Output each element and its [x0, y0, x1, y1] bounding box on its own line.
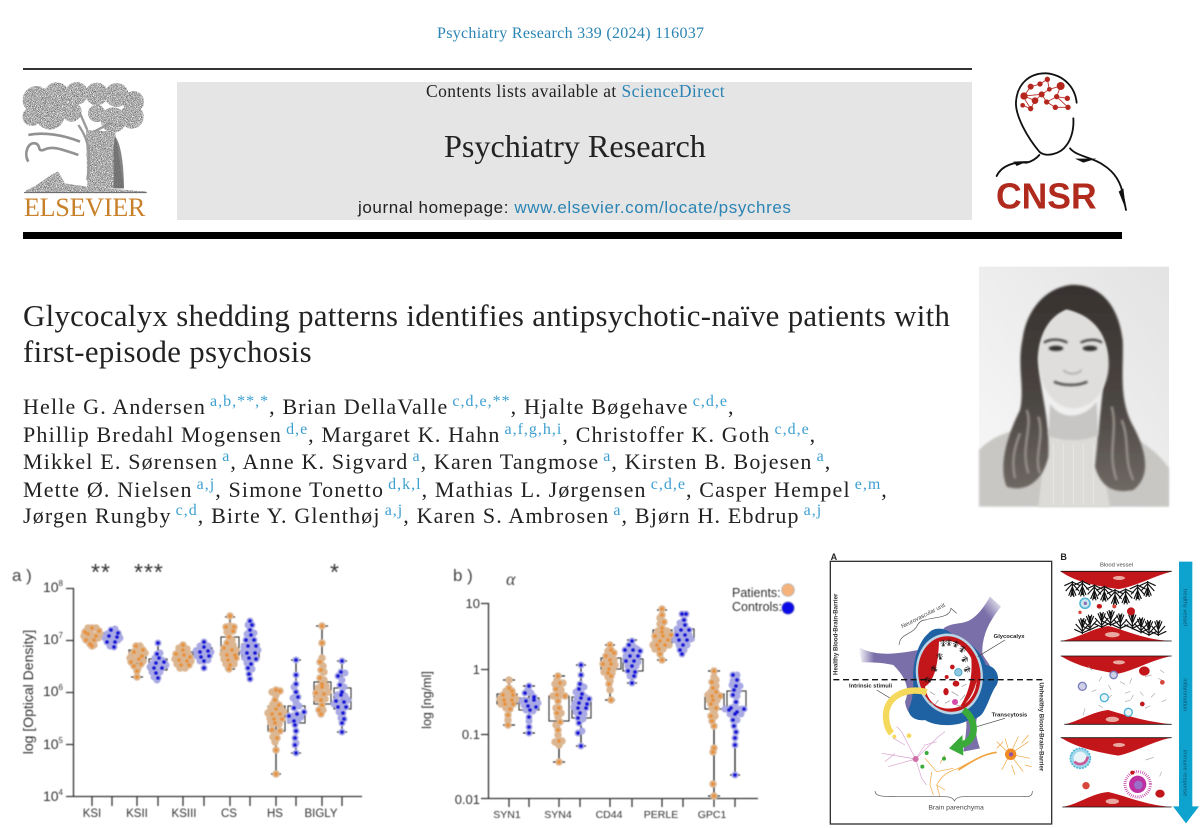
- dashed divider: [833, 678, 1043, 682]
- green particles: [920, 751, 946, 769]
- y ticks: 8: [59, 579, 64, 588]
- y ticks: 10: [43, 579, 59, 595]
- glycocalyx callout: Glycocalyx: [994, 634, 1025, 640]
- article title: first-episode psychosis: [23, 335, 312, 369]
- controls dots: [105, 621, 348, 753]
- tufts in vessel: [923, 639, 971, 685]
- chart a: [12, 559, 363, 820]
- significance stars: ***: [134, 559, 164, 585]
- box plots: [497, 629, 746, 721]
- logo wordmark: ELSEVIER: [24, 193, 145, 222]
- panel letter A: A: [831, 552, 838, 562]
- glycocalyx callout: [978, 634, 1025, 657]
- authors: Mikkel E. Sørensena, Anne K. Sigvarda, Karen Tangmosea, Kirsten B. Bojesena,: [23, 448, 831, 474]
- barrier side labels: Healthy Blood-Brain-Barrier: [832, 593, 839, 675]
- top rule: [23, 68, 972, 70]
- legend: Patients:: [732, 586, 781, 600]
- endothelial blue ring: [909, 629, 998, 725]
- blood vessel label: Blood vessel: [1100, 563, 1133, 569]
- article title: Glycocalyx shedding patterns identifies antipsychotic-naïve patients with: [23, 299, 950, 333]
- y ticks: 1: [473, 662, 480, 677]
- y ticks: 0.01: [455, 792, 480, 807]
- journal banner: [177, 82, 972, 220]
- x labels: BIGLY: [304, 808, 338, 820]
- intrinsic stimuli callout and yellow arrow: [849, 683, 927, 739]
- thick rule: [23, 232, 1122, 239]
- shedding fibers: [928, 684, 967, 707]
- astrocyte: [858, 597, 1001, 752]
- y ticks: 10: [43, 683, 59, 699]
- chart b: [420, 566, 796, 821]
- panel B inflammation vessel: [1061, 656, 1172, 724]
- neurovascular brace: [899, 608, 957, 645]
- author portrait: [978, 266, 1170, 508]
- vessel: [909, 628, 989, 720]
- controls dots: [522, 614, 744, 775]
- alpha label: α: [506, 569, 516, 589]
- panel B healthy vessel: [1061, 571, 1172, 641]
- y ticks: 10: [43, 736, 59, 752]
- panel A: blood-brain barrier diagram: Unhealthy Blood-Brain-Barrier: [1038, 682, 1045, 772]
- transcytosis callout and green arrow: [949, 710, 1027, 756]
- x labels: [493, 809, 726, 821]
- y ticks: 5: [59, 736, 64, 745]
- journal name: Psychiatry Research: [444, 128, 706, 164]
- y ticks: 10: [466, 596, 480, 611]
- legend: [732, 584, 794, 614]
- x labels: HS: [267, 808, 283, 820]
- pink neuron: [882, 727, 945, 785]
- authors: Jørgen Rungbyc,d, Birte Y. Glenthøja,j, Karen S. Ambrosena, Bjørn H. Ebdrupa,j: [23, 502, 822, 528]
- homepage line: journal homepage: www.elsevier.com/locate/psychres: [358, 198, 792, 217]
- panel label b: b ): [453, 566, 473, 585]
- intrinsic stimuli callout and yellow arrow: Intrinsic stimuli: [849, 683, 892, 689]
- x labels: CS: [221, 808, 237, 820]
- significance stars: **: [91, 559, 111, 585]
- significance stars: *: [330, 559, 339, 585]
- panel letter B: B: [1060, 552, 1067, 562]
- x labels: SYN4: [544, 809, 572, 821]
- box plots: [83, 633, 351, 731]
- progress arrow: immune response: [1182, 750, 1188, 796]
- x labels: KSIII: [172, 808, 196, 820]
- significance stars: [91, 559, 339, 585]
- y ticks: 7: [59, 631, 64, 640]
- x labels: GPC1: [698, 809, 726, 821]
- logo: CNSR: [996, 72, 1127, 216]
- whiskers: [503, 609, 740, 796]
- article title: [23, 299, 950, 369]
- panel B immune response vessel: [1061, 738, 1172, 807]
- y axis title: log [ng/ml]: [420, 671, 434, 729]
- orange neuron: [925, 735, 1032, 797]
- contents line: Contents lists available at ScienceDirect: [426, 81, 725, 101]
- y ticks: 10: [43, 788, 59, 804]
- panel A: blood-brain barrier diagram: [830, 552, 1199, 825]
- neurovascular label: Neurovascular unit: [901, 603, 947, 630]
- x labels: [83, 808, 338, 820]
- authors: Phillip Bredahl Mogensend,e, Margaret K. Hahna,f,g,h,i, Christoffer K. Gothc,d,e,: [23, 421, 816, 447]
- x labels: KSI: [83, 808, 101, 820]
- panel label a: a ): [12, 566, 32, 585]
- whiskers: [88, 617, 347, 774]
- authors: Helle G. Andersena,b,**,*, Brian DellaVallec,d,e,**, Hjalte Bøgehavec,d,e,: [23, 393, 735, 419]
- x labels: KSII: [126, 808, 148, 820]
- y ticks: 0.1: [462, 727, 480, 742]
- authors: Mette Ø. Nielsena,j, Simone Tonettod,k,l, Mathias L. Jørgensenc,d,e, Casper Hempele,m,: [23, 476, 888, 502]
- logo text: CNSR: [996, 175, 1097, 216]
- y ticks: [43, 579, 64, 804]
- y ticks: 4: [59, 788, 64, 797]
- x labels: SYN1: [493, 809, 521, 821]
- progress arrow: healthy vessel: [1182, 589, 1188, 626]
- journal citation: Psychiatry Research 339 (2024) 116037: [437, 25, 704, 42]
- y axis title: log [Optical Density]: [20, 630, 36, 754]
- y ticks: 10: [43, 631, 59, 647]
- x labels: PERLE: [644, 809, 678, 821]
- y ticks: [455, 596, 480, 807]
- logo: Elsevier tree: [22, 82, 147, 194]
- axes: [66, 588, 362, 806]
- axes: [481, 604, 758, 807]
- parenchyma brace: [875, 791, 1032, 801]
- y ticks: 6: [59, 683, 64, 692]
- blood cells: [943, 665, 959, 695]
- legend: Controls:: [732, 600, 782, 614]
- authors: [23, 393, 888, 528]
- patients dots: [84, 616, 328, 774]
- patients dots: [500, 609, 720, 796]
- transcytosis callout and green arrow: Transcytosis: [992, 712, 1027, 718]
- progress arrow: inflammation: [1182, 678, 1188, 711]
- parenchyma label: Brain parenchyma: [928, 804, 984, 811]
- progress arrow: [1173, 562, 1199, 823]
- x labels: CD44: [596, 809, 623, 821]
